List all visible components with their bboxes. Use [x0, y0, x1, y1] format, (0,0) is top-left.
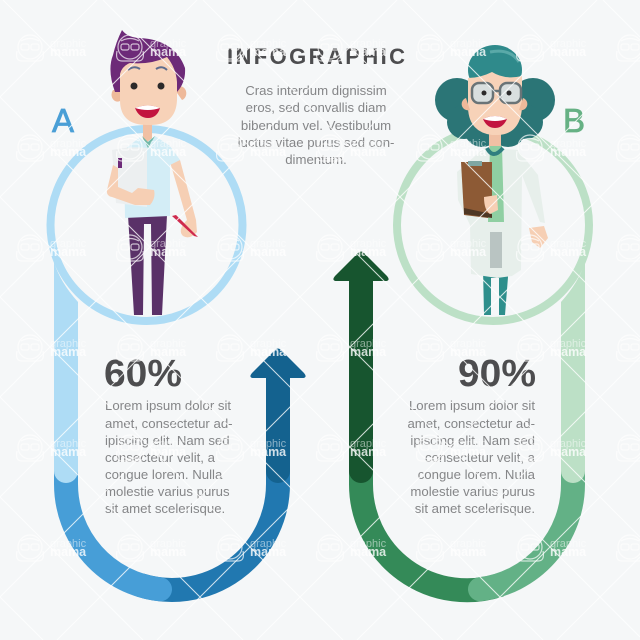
body text A [105, 398, 233, 516]
watermark overlay: graphic [150, 138, 187, 150]
watermark overlay: mama [450, 45, 487, 59]
watermark overlay: mama [550, 345, 587, 359]
watermark overlay: graphic [250, 438, 287, 450]
watermark overlay: graphic [250, 238, 287, 250]
doctor trousers [482, 222, 508, 315]
watermark overlay: mama [50, 545, 87, 559]
body text B: consectetur velit, a [425, 450, 536, 465]
U-track dark segment [140, 460, 278, 590]
doctor coat [457, 148, 545, 278]
doctor eyes [482, 90, 512, 96]
watermark overlay: graphic [350, 438, 387, 450]
blue arrow [250, 348, 306, 483]
watermark overlay: graphic [550, 438, 587, 450]
watermark overlay: graphic [150, 338, 187, 350]
man trousers [128, 215, 167, 315]
man neck [143, 122, 152, 142]
intro text block: bibendum vel. Vestibulum [241, 118, 391, 133]
man collar [142, 136, 155, 148]
body text A: sit amet scelerisque. [105, 501, 225, 516]
doctor side hair [435, 78, 555, 147]
watermark overlay: graphic [50, 538, 87, 550]
man teeth [135, 106, 160, 110]
watermark overlay: mama [350, 545, 387, 559]
watermark overlay: mama [550, 45, 587, 59]
watermark overlay: mama [150, 245, 187, 259]
watermark overlay: graphic [350, 38, 387, 50]
intro text block: dimentum. [285, 152, 347, 167]
doctor skirt panel [490, 232, 502, 268]
watermark overlay: mama [150, 545, 187, 559]
panel: option B track [333, 129, 589, 590]
clipboard clip [468, 161, 482, 166]
watermark overlay: mama [350, 45, 387, 59]
percent A: 60% [104, 353, 182, 395]
body text A: congue lorem. Nulla [105, 467, 223, 482]
intro text block: Cras interdum dignissim [245, 83, 387, 98]
watermark overlay: mama [150, 145, 187, 159]
doctor hair shine [490, 51, 519, 62]
watermark overlay: graphic [150, 38, 187, 50]
watermark overlay: mama [250, 545, 287, 559]
body text A: ipiscing elit. Nam sed [105, 433, 230, 448]
body text B: sit amet scelerisque. [415, 501, 535, 516]
watermark overlay: mama [250, 345, 287, 359]
body text B: ipiscing elit. Nam sed [410, 433, 535, 448]
body text B: amet, consectetur ad- [407, 416, 535, 431]
character: man with papers [107, 30, 198, 315]
letter A: A [52, 102, 74, 139]
watermark overlay: graphic [350, 138, 387, 150]
watermark overlay: graphic [250, 538, 287, 550]
watermark overlay: mama [50, 445, 87, 459]
body text B: Lorem ipsum dolor sit [409, 398, 535, 413]
doctor ears [462, 98, 527, 110]
man shirt [124, 136, 180, 218]
man left arm [107, 165, 154, 205]
man eyes [130, 82, 164, 90]
body text B: molestie varius purus [410, 484, 535, 499]
watermark overlay: mama [450, 245, 487, 259]
character: doctor [435, 45, 555, 315]
watermark overlay: graphic [450, 238, 487, 250]
body text A: amet, consectetur ad- [105, 416, 233, 431]
watermark overlay: mama [450, 445, 487, 459]
man ears [112, 86, 186, 102]
man hair [110, 30, 185, 92]
man right arm [170, 160, 197, 237]
watermark overlay: mama [350, 245, 387, 259]
watermark overlay: graphic [550, 38, 587, 50]
watermark overlay: graphic [150, 238, 187, 250]
clipboard [461, 162, 492, 218]
circle A [50, 129, 242, 321]
watermark overlay: graphic [550, 238, 587, 250]
U-track dark segment B [361, 460, 500, 590]
man face [120, 57, 177, 125]
watermark overlay: graphic [250, 138, 287, 150]
watermark overlay: graphic [450, 338, 487, 350]
letter B: B [563, 102, 585, 139]
body text B: congue lorem. Nulla [418, 467, 536, 482]
watermark overlay: graphic [50, 338, 87, 350]
watermark overlay: mama [550, 145, 587, 159]
watermark overlay: mama [50, 145, 87, 159]
panel: option A track [50, 129, 306, 590]
watermark overlay: mama [350, 345, 387, 359]
watermark overlay: mama [250, 145, 287, 159]
watermark overlay: graphic [450, 138, 487, 150]
stethoscope [487, 148, 503, 154]
doctor teeth [483, 116, 507, 121]
red pen [172, 215, 198, 237]
watermark overlay: mama [50, 345, 87, 359]
watermark overlay: mama [50, 245, 87, 259]
watermark overlay: mama [450, 145, 487, 159]
body text B [407, 398, 536, 516]
watermark overlay: mama [350, 445, 387, 459]
doctor hand [484, 195, 498, 214]
watermark overlay: graphic [550, 138, 587, 150]
clipboard base [464, 208, 492, 218]
watermark overlay: mama [150, 345, 187, 359]
man eyebrows [128, 67, 167, 70]
watermark overlay: graphic [250, 38, 287, 50]
watermark overlay: graphic [450, 538, 487, 550]
intro text block: luctus vitae purus sed con- [238, 135, 394, 150]
watermark overlay: mama [450, 545, 487, 559]
body text A: Lorem ipsum dolor sit [105, 398, 231, 413]
title: INFOGRAPHIC [227, 44, 405, 69]
watermark overlay: mama [150, 445, 187, 459]
watermark overlay: mama [50, 45, 87, 59]
watermark overlay: graphic [350, 238, 387, 250]
doctor top hair [468, 45, 522, 95]
green arrow [333, 252, 389, 483]
watermark overlay: mama [250, 445, 287, 459]
doctor other hand [529, 226, 548, 248]
watermark overlay: graphic [150, 538, 187, 550]
watermark overlay: graphic [450, 438, 487, 450]
doctor mouth [483, 116, 507, 128]
watermark overlay: graphic [350, 338, 387, 350]
body text A: consectetur velit, a [105, 450, 216, 465]
watermark overlay: graphic [150, 438, 187, 450]
percent B: 90% [458, 353, 536, 395]
watermark overlay: mama [450, 345, 487, 359]
circle B [397, 129, 589, 321]
light stem B [561, 262, 585, 483]
doctor glasses [472, 83, 521, 103]
light stem [54, 262, 78, 483]
doctor face [468, 72, 522, 135]
body text A: molestie varius purus [105, 484, 230, 499]
watermark overlay: mama [250, 245, 287, 259]
watermark overlay: mama [550, 545, 587, 559]
paper clip [118, 158, 122, 168]
watermark overlay: mama [250, 45, 287, 59]
watermark overlay: mama [150, 45, 187, 59]
U-track light segment B [480, 460, 573, 589]
watermark overlay: graphic [550, 338, 587, 350]
watermark overlay: graphic [50, 238, 87, 250]
watermark overlay: graphic [50, 438, 87, 450]
watermark overlay: graphic [550, 538, 587, 550]
U-track mid segment [66, 460, 160, 589]
papers [112, 147, 147, 207]
watermark overlay: graphic [450, 38, 487, 50]
doctor neck [489, 130, 501, 150]
man mouth [135, 106, 160, 118]
doctor scrub [488, 146, 504, 222]
intro text block [238, 83, 394, 167]
watermark overlay: mama [550, 445, 587, 459]
watermark overlay: graphic [250, 338, 287, 350]
intro text block: eros, sed convallis diam [246, 100, 386, 115]
watermark overlay: graphic [50, 38, 87, 50]
watermark overlay: mama [350, 145, 387, 159]
watermark overlay: graphic [50, 138, 87, 150]
watermark overlay: mama [550, 245, 587, 259]
watermark overlay: graphic [350, 538, 387, 550]
